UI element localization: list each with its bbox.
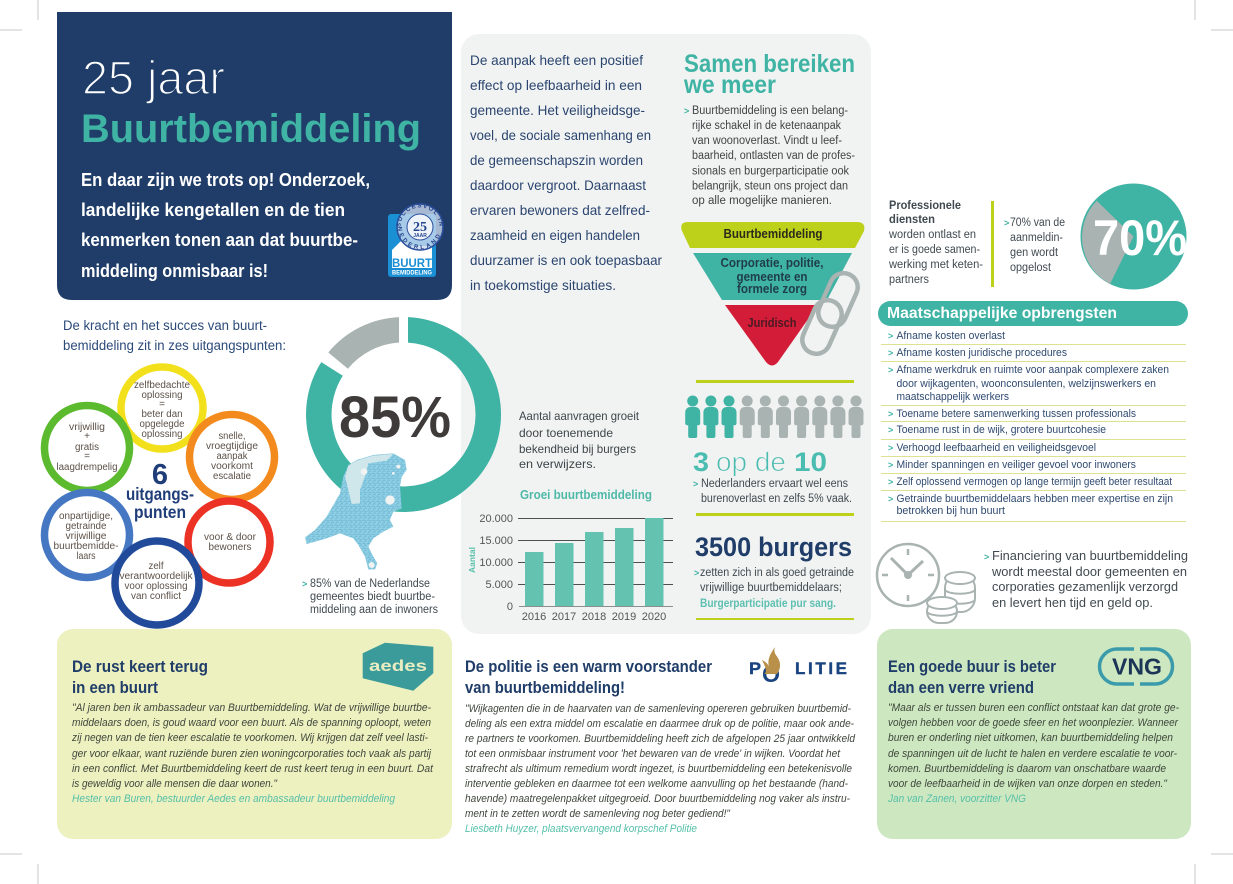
- funnel tier: Corporatie, politie: gemeente en: [736, 269, 808, 284]
- list: opbrengsten: Afname kosten overlast: [896, 330, 1005, 342]
- circle text: snelle aanpak: aanpak: [216, 451, 248, 462]
- heading: Samen bereiken we meer: [683, 50, 855, 99]
- x axis labels: 2020: [642, 611, 666, 623]
- quote: de spanningen uit de lucht te halen en verdere escalatie te voor-: [888, 748, 1177, 760]
- funnel tier: Juridisch: [725, 305, 818, 366]
- circle text: snelle aanpak: vroegtijdige: [206, 441, 258, 452]
- intro text: kenmerken tonen aan dat buurtbe-: [81, 230, 358, 250]
- y axis labels: 20.000: [479, 513, 513, 525]
- list: opbrengsten: Getrainde buurtbemiddelaars hebben meer expertise en zijn: [896, 493, 1173, 505]
- text: professionele diensten: Professionele: [889, 200, 961, 212]
- text: positief effect: ervaren bewoners dat zelfred-: [470, 202, 650, 218]
- text: getrainde vrijwilligers: [694, 567, 854, 610]
- attribution: Liesbeth Huyzer, plaatsvervangend korpschef Politie: [465, 823, 697, 835]
- circle text: zelf verantwoordelijk: verantwoordelijk: [120, 571, 194, 582]
- y axis labels: 5.000: [485, 579, 513, 591]
- y axis labels: 10.000: [479, 557, 513, 569]
- x axis labels: 2016: [522, 611, 546, 623]
- circle text: vrijwillig gratis: gratis: [75, 442, 99, 453]
- list: opbrengsten: >: [888, 409, 893, 419]
- text: positief effect: zaamheid en eigen handelen: [470, 227, 640, 243]
- text: 70% opgelost: aanmeldin-: [1010, 232, 1063, 244]
- circle text: zelfbedachte oplossing: opgelegde: [140, 419, 185, 430]
- quote: komen. Buurtbemiddeling is daarom van onschatbare waarde: [888, 763, 1166, 775]
- logo: Politie: P: [749, 659, 761, 678]
- logo: Buurtbemiddeling 25 jaar stamp: 25: [413, 220, 427, 235]
- quote: "Al jaren ben ik ambassadeur van Buurtbemiddeling. Wat de vrijwillige buurtbe-: [72, 702, 431, 714]
- logo: Buurtbemiddeling 25 jaar stamp: JAAR: [413, 233, 427, 239]
- list: opbrengsten: >: [888, 425, 893, 435]
- text: professionele diensten: diensten: [889, 214, 935, 226]
- text: de kracht intro: De kracht en het succes van buurt-: [63, 318, 267, 333]
- text: getrainde vrijwilligers: >: [694, 568, 699, 578]
- list: opbrengsten: Zelf oplossend vermogen op lange termijn geeft beter resultaat: [896, 476, 1172, 488]
- number: 70%: 70%: [1093, 210, 1187, 266]
- attribution: Hester van Buren, bestuurder Aedes en ambassadeur buurtbemiddeling: [72, 793, 396, 805]
- heading: Samen bereiken we meer: we meer: [683, 71, 776, 99]
- circle text: onpartijdige bemiddelaars: laars: [76, 551, 96, 562]
- panel: VNG quote: [877, 629, 1191, 839]
- text: positief effect: de gemeenschapszin worden: [470, 152, 643, 168]
- text: financiering: wordt meestal door gemeenten en: [991, 564, 1187, 579]
- quote: ger voor elkaar, want ruziënde buren zien woningcorporaties toch vaak als partij: [72, 748, 432, 760]
- text: getrainde vrijwilligers: vrijwillige buurtbemiddelaars;: [700, 582, 842, 594]
- list: opbrengsten: door wijkagenten, woonconsulenten, welzijnswerkers en: [896, 378, 1156, 390]
- logo: Politie: LITIE: [795, 659, 847, 678]
- stat: 3 op de 10: op de: [716, 447, 786, 477]
- y axis title: Aantal: [467, 547, 477, 573]
- heading: [72, 658, 208, 697]
- quote: [888, 702, 1179, 790]
- list: opbrengsten: Afname werkdruk en ruimte voor aanpak complexere zaken: [896, 364, 1169, 376]
- circle text: onpartijdige bemiddelaars: onpartijdige,: [59, 511, 113, 522]
- quote: middelaars doen, is goud waard voor een buurt. Als de spanning oploopt, weten: [72, 717, 431, 729]
- circle text: voor en door bewoners: bewoners: [208, 542, 252, 553]
- heading: [888, 658, 1057, 697]
- diagram: zes uitgangspunten circles: [44, 367, 274, 625]
- quote: zij negen van de tien keer escalatie te voorkomen. Wij krijgen dat zelf veel lasti-: [71, 732, 428, 744]
- circle text: zelfbedachte oplossing: beter dan: [142, 409, 182, 420]
- y axis labels: [479, 513, 513, 613]
- circle text: voor en door bewoners: [204, 532, 257, 553]
- funnel tier: Corporatie, politie: [693, 253, 852, 300]
- stat: 3500 burgers: 3500 burgers: [695, 532, 852, 562]
- stat: 3 op de 10: 10: [794, 447, 827, 477]
- text: schakel in de ketenaanpak: >: [684, 106, 689, 116]
- list: opbrengsten: [881, 330, 1186, 522]
- list: opbrengsten: >: [888, 494, 893, 504]
- circle text: voor en door bewoners: voor & door: [204, 532, 257, 543]
- text: burenoverlast: >: [693, 479, 698, 489]
- quote: [71, 702, 434, 790]
- quote: is geweldig voor alle mensen die daar wonen.": [72, 778, 278, 790]
- quote: buren er onderling niet uitkomen, kan buurtbemiddeling helpen: [888, 732, 1173, 744]
- x axis labels: 2018: [582, 611, 606, 623]
- number: 85%: 85%: [339, 385, 451, 450]
- attribution: Jan van Zanen, voorzitter VNG: [887, 793, 1026, 805]
- circle text: snelle aanpak: [206, 431, 258, 482]
- label: 6 uitgangspunten: punten: [134, 502, 186, 522]
- list: opbrengsten: Toename betere samenwerking tussen professionals: [896, 408, 1136, 420]
- text: financiering: Financiering van buurtbemiddeling: [992, 548, 1188, 563]
- circle text: zelfbedachte oplossing: [134, 380, 190, 440]
- text: 85% gemeentes: >: [302, 579, 307, 589]
- text: professionele diensten: [888, 200, 983, 286]
- banner: Maatschappelijke opbrengsten: Maatschappelijke opbrengsten: [887, 305, 1117, 322]
- label: 6 uitgangspunten: [126, 459, 194, 522]
- quote: deling als een extra middel om escalatie en daarmee druk op de politie, maar ook ande-: [465, 718, 854, 730]
- quote: tot een onmisbaar instrument voor 'het bewaren van de vrede' in wijken. Voordat het: [465, 748, 841, 760]
- text: financiering: [984, 548, 1188, 610]
- panel: grey centre background: [461, 34, 871, 634]
- divider: [696, 380, 854, 383]
- icon: clock and coins: [877, 544, 975, 623]
- quote: ment in te zetten wordt de samenleving nog beter gediend!": [465, 808, 731, 820]
- text: financiering: >: [984, 552, 989, 562]
- quote: "Maar als er tussen buren een conflict ontstaat kan dat grote ge-: [888, 702, 1179, 714]
- panel: Aedes quote: [57, 629, 452, 839]
- icon: chain: [798, 269, 862, 358]
- icon: people 3 of 10: [685, 396, 864, 438]
- list: opbrengsten: >: [888, 477, 893, 487]
- heading: De rust keert terug: [72, 658, 208, 676]
- quote: voor de leefbaarheid in de wijken van onze dorpen en steden.": [888, 778, 1168, 790]
- panel: Politie quote: [465, 647, 856, 835]
- funnel tier: Buurtbemiddeling: [681, 222, 864, 248]
- logo: Aedes: aedes: [369, 658, 427, 675]
- chart title: Groei buurtbemiddeling: [520, 488, 652, 502]
- heading: in een buurt: [72, 679, 158, 697]
- quote: interventie gebleken en daarmee tot een welkome aanvulling op het bestaande (hand-: [465, 778, 848, 790]
- y axis labels: 0: [507, 601, 513, 613]
- logo: VNG: [1100, 649, 1172, 684]
- quote: [465, 703, 856, 820]
- text: schakel in de ketenaanpak: belangrijk, steun ons project dan: [692, 180, 848, 192]
- label: 6 uitgangspunten: uitgangs-: [126, 484, 194, 504]
- logo: Buurtbemiddeling 25 jaar stamp: BUURT: [392, 256, 433, 270]
- text: financiering: corporaties gezamenlijk verzorgd: [992, 579, 1178, 594]
- list: opbrengsten: >: [888, 443, 893, 453]
- y axis labels: 15.000: [479, 535, 513, 547]
- text: aantal aanvragen: bekendheid bij burgers: [519, 442, 636, 456]
- text: 70% opgelost: 70% van de: [1010, 217, 1065, 229]
- list: opbrengsten: >: [888, 460, 893, 470]
- text: burenoverlast: [693, 478, 852, 505]
- diagram: funnel ketenaanpak: [681, 222, 864, 366]
- text: positief effect: in toekomstige situaties.: [470, 277, 616, 293]
- circle text: snelle aanpak: snelle,: [218, 431, 246, 442]
- text: schakel in de ketenaanpak: Buurtbemiddeling is een belang-: [692, 105, 848, 117]
- chart: groei buurtbemiddeling: [467, 488, 673, 623]
- text: 85% gemeentes: gemeentes biedt buurtbe-: [310, 591, 435, 603]
- quote: strafrecht als ultimum remedium wordt ingezet, is buurtbemiddeling een betekenisvolle: [465, 763, 852, 775]
- text: positief effect: gemeente. Het veiligheidsge-: [470, 102, 645, 118]
- intro text: landelijke kengetallen en de tien: [81, 200, 345, 220]
- text: schakel in de ketenaanpak: op alle mogelijke manieren.: [692, 195, 832, 207]
- text: positief effect: daardoor vergroot. Daarnaast: [470, 177, 646, 193]
- text: financiering: en levert hen tijd en geld op.: [992, 595, 1153, 610]
- text: getrainde vrijwilligers: zetten zich in als goed getrainde: [700, 567, 854, 579]
- text: aantal aanvragen: door toenemende: [519, 426, 613, 440]
- text: schakel in de ketenaanpak: van woonoverlast. Vindt u leef-: [692, 135, 842, 147]
- circle text: onpartijdige bemiddelaars: buurtbemidde-: [54, 541, 118, 552]
- circle text: zelf verantwoordelijk: van conflict: [131, 591, 181, 602]
- funnel tier: Corporatie, politie: Corporatie, politie,: [720, 255, 824, 270]
- funnel tier: Buurtbemiddeling: Buurtbemiddeling: [724, 226, 823, 241]
- circle text: zelfbedachte oplossing: oplossing: [142, 429, 182, 440]
- x axis labels: [522, 611, 666, 623]
- text: positief effect: duurzamer is en ook toepasbaar: [470, 252, 662, 268]
- circle text: onpartijdige bemiddelaars: [54, 511, 118, 562]
- quote: in een conflict. Met Buurtbemiddeling keert de rust keert terug in een buurt. Dat: [72, 763, 434, 775]
- text: schakel in de ketenaanpak: [684, 105, 855, 207]
- quote: "Wijkagenten die in de haarvaten van de samenleving opereren gebruiken buurtbemid-: [465, 703, 851, 715]
- text: aantal aanvragen: en verwijzers.: [519, 457, 596, 471]
- circle text: zelf verantwoordelijk: [120, 561, 194, 602]
- logo: Buurtbemiddeling 25 jaar stamp: NEDERLAND: [398, 226, 440, 249]
- logo: Aedes: [363, 643, 433, 691]
- heading: dan een verre vriend: [888, 679, 1034, 697]
- list: opbrengsten: maatschappelijk werkers: [896, 391, 1009, 403]
- text: positief effect: [470, 52, 662, 293]
- list: opbrengsten: >: [888, 348, 893, 358]
- stat: 3 op de 10: 3: [693, 447, 709, 477]
- text: professionele diensten: partners: [889, 274, 929, 286]
- title: Buurtbemiddeling: Buurtbemiddeling: [81, 107, 421, 151]
- chart: donut 85%: [306, 317, 501, 512]
- circle text: zelfbedachte oplossing: oplossing: [142, 390, 182, 401]
- logo: Buurtbemiddeling 25 jaar stamp: BEMIDDELING: [392, 270, 432, 276]
- text: aantal aanvragen: [519, 409, 640, 471]
- quote: havende) maatregelenpakket uitgegroeid. Door buurtbemiddeling nog vaker als instru-: [465, 793, 850, 805]
- text: 85% gemeentes: [302, 578, 438, 616]
- circle text: vrijwillig gratis: laagdrempelig: [56, 462, 118, 473]
- circle text: vrijwillig gratis: [56, 422, 118, 473]
- funnel tier: Juridisch: Juridisch: [748, 315, 797, 330]
- logo: Politie: O: [762, 661, 780, 687]
- list: opbrengsten: >: [888, 365, 893, 375]
- text: 85% gemeentes: 85% van de Nederlandse: [310, 578, 430, 590]
- text: 85% gemeentes: middeling aan de inwoners: [310, 604, 438, 616]
- circle text: snelle aanpak: escalatie: [213, 471, 251, 482]
- text: professionele diensten: worden ontlast en: [888, 229, 976, 241]
- text: 70% opgelost: >: [1004, 218, 1009, 228]
- text: aantal aanvragen: Aantal aanvragen groeit: [519, 409, 640, 423]
- logo: Buurtbemiddeling 25 jaar stamp: SUCCESVOL IN: [396, 204, 444, 227]
- divider: [696, 513, 854, 516]
- panel: title header: [57, 12, 452, 300]
- list: opbrengsten: Afname kosten juridische procedures: [896, 347, 1067, 359]
- list: opbrengsten: >: [888, 331, 893, 341]
- heading: Een goede buur is beter: [888, 658, 1057, 676]
- text: getrainde vrijwilligers: Burgerparticipatie pur sang.: [700, 598, 836, 610]
- x axis labels: 2017: [552, 611, 576, 623]
- intro text: middeling onmisbaar is!: [81, 261, 268, 281]
- logo: Politie: [749, 647, 847, 687]
- list: opbrengsten: Toename rust in de wijk, grotere buurtcohesie: [896, 424, 1106, 436]
- text: positief effect: De aanpak heeft een positief: [470, 52, 643, 68]
- circle text: zelfbedachte oplossing: zelfbedachte: [134, 380, 190, 391]
- circle text: zelf verantwoordelijk: voor oplossing: [124, 581, 188, 592]
- circle text: vrijwillig gratis: vrijwillig: [69, 422, 105, 433]
- text: 70% opgelost: opgelost: [1010, 262, 1052, 274]
- banner: Maatschappelijke opbrengsten: [878, 301, 1188, 326]
- circle text: snelle aanpak: voorkomt: [211, 461, 253, 472]
- text: professionele diensten: werking met keten-: [888, 259, 983, 271]
- funnel tier: Corporatie, politie: formele zorg: [737, 281, 807, 296]
- text: positief effect: voel, de sociale samenhang en: [470, 127, 651, 143]
- list: opbrengsten: Minder spanningen en veiliger gevoel voor inwoners: [896, 459, 1136, 471]
- quote: re partners te voorkomen. Buurtbemiddeling heeft zich de afgelopen 25 jaar ontwikkeld: [465, 733, 856, 745]
- stat: 3 op de 10: [693, 447, 827, 477]
- divider: [696, 618, 854, 620]
- heading: van buurtbemiddeling!: [465, 679, 625, 697]
- text: 70% opgelost: gen wordt: [1010, 247, 1059, 259]
- text: professionele diensten: er is goede samen-: [889, 244, 980, 256]
- title: 25 jaar: 25 jaar: [82, 51, 225, 104]
- list: opbrengsten: betrokken bij hun buurt: [896, 505, 1005, 517]
- text: schakel in de ketenaanpak: rijke schakel in de ketenaanpak: [692, 120, 841, 132]
- list: opbrengsten: Verhoogd leefbaarheid en veiligheidsgevoel: [896, 442, 1096, 454]
- text: schakel in de ketenaanpak: sionals en burgerparticipatie ook: [692, 166, 849, 178]
- text: 70% opgelost: [1004, 217, 1065, 274]
- circle text: zelf verantwoordelijk: zelf: [148, 561, 164, 572]
- text: burenoverlast: Nederlanders ervaart wel eens: [701, 478, 848, 490]
- text: schakel in de ketenaanpak: baarheid, ontlasten van de profes-: [692, 150, 855, 162]
- chart: pie 70%: [1080, 184, 1187, 290]
- x axis labels: 2019: [612, 611, 636, 623]
- intro text: [81, 170, 370, 281]
- logo: VNG: VNG: [1112, 654, 1162, 680]
- logo: Buurtbemiddeling 25 jaar stamp: [388, 203, 444, 277]
- heading: De politie is een warm voorstander: [465, 658, 713, 676]
- intro text: En daar zijn we trots op! Onderzoek,: [81, 170, 370, 190]
- circle text: zelfbedachte oplossing: =: [159, 399, 165, 410]
- label: 6 uitgangspunten: 6: [152, 459, 168, 491]
- bars: [525, 518, 664, 606]
- circle text: vrijwillig gratis: +: [84, 431, 90, 442]
- quote: volgen hebben voor de goede sfeer en het woonplezier. Wanneer: [888, 717, 1179, 729]
- text: de kracht intro: bemiddeling zit in zes uitgangspunten:: [63, 338, 286, 353]
- circle text: onpartijdige bemiddelaars: getrainde: [66, 521, 107, 532]
- heading: Samen bereiken we meer: Samen bereiken: [684, 50, 855, 78]
- text: positief effect: effect op leefbaarheid in een: [470, 77, 642, 93]
- heading: [465, 658, 713, 697]
- text: burenoverlast: burenoverlast en zelfs 5% vaak.: [701, 493, 852, 505]
- map: Nederland: [305, 453, 407, 569]
- circle text: onpartijdige bemiddelaars: vrijwillige: [66, 531, 107, 542]
- circle text: vrijwillig gratis: =: [84, 451, 90, 462]
- text: de kracht intro: [63, 318, 286, 353]
